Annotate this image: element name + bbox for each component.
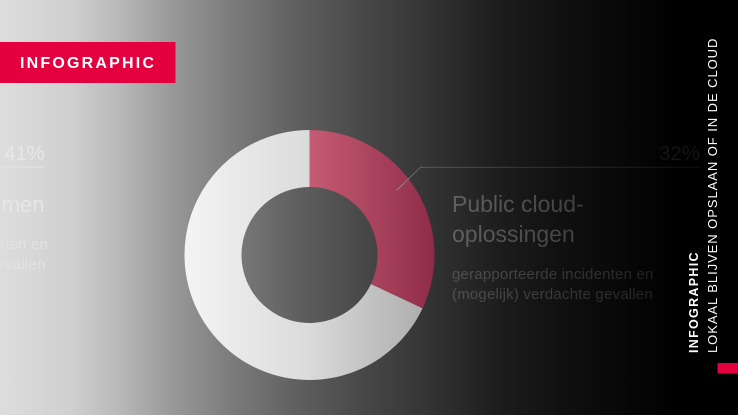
vertical title: LOKAAL BLIJVEN OPSLAAN OF IN DE CLOUD	[705, 38, 720, 353]
banner: infographic	[0, 42, 176, 83]
description: gerapporteerde incidenten en	[452, 266, 654, 283]
leader line	[396, 167, 700, 190]
vertical title	[687, 38, 720, 353]
percentage 41%: 41%	[4, 143, 45, 165]
percentage 32%: 32%	[659, 142, 700, 165]
red marker	[718, 363, 738, 374]
donut chart	[184, 130, 434, 380]
heading: public cloud: Public cloud-	[452, 191, 584, 217]
segment: public cloud 32%	[310, 130, 434, 308]
banner: infographic: INFOGRAPHIC	[20, 55, 156, 72]
segment: remaining 68%	[184, 130, 423, 380]
heading: public cloud: oplossingen	[452, 221, 575, 247]
left panel: cropped statistic	[0, 143, 48, 273]
cropped heading: men	[2, 192, 44, 217]
vertical title: INFOGRAPHIC	[687, 251, 701, 353]
description: (mogelijk) verdachte gevallen	[452, 286, 653, 303]
